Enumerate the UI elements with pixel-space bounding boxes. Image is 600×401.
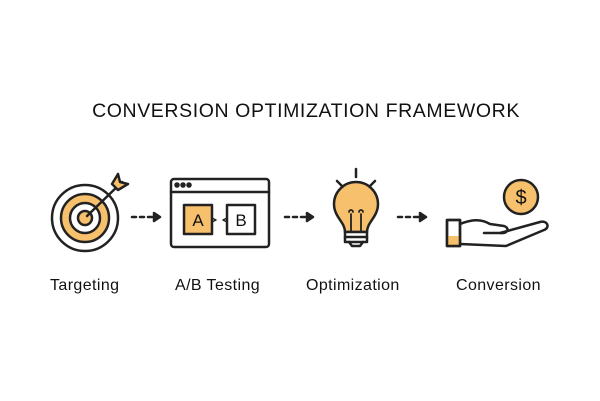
title: CONVERSION OPTIMIZATION FRAMEWORK xyxy=(92,100,520,122)
label: A/B Testing: A/B Testing xyxy=(175,277,260,294)
icon: hand with coin xyxy=(447,180,547,246)
label: Conversion: Conversion xyxy=(456,277,541,294)
icon: light bulb xyxy=(334,169,378,246)
icon: browser A/B: B xyxy=(235,211,247,230)
icon: target xyxy=(52,174,128,251)
arrow 3 xyxy=(398,213,426,221)
label: Optimization: Optimization xyxy=(306,277,400,294)
icon: browser A/B: A xyxy=(192,211,204,230)
icon: hand with coin: $ xyxy=(515,187,527,209)
arrow 1 xyxy=(132,213,160,221)
arrow 2 xyxy=(285,213,313,221)
label: Targeting: Targeting xyxy=(50,277,119,294)
icon: browser A/B xyxy=(171,179,269,247)
